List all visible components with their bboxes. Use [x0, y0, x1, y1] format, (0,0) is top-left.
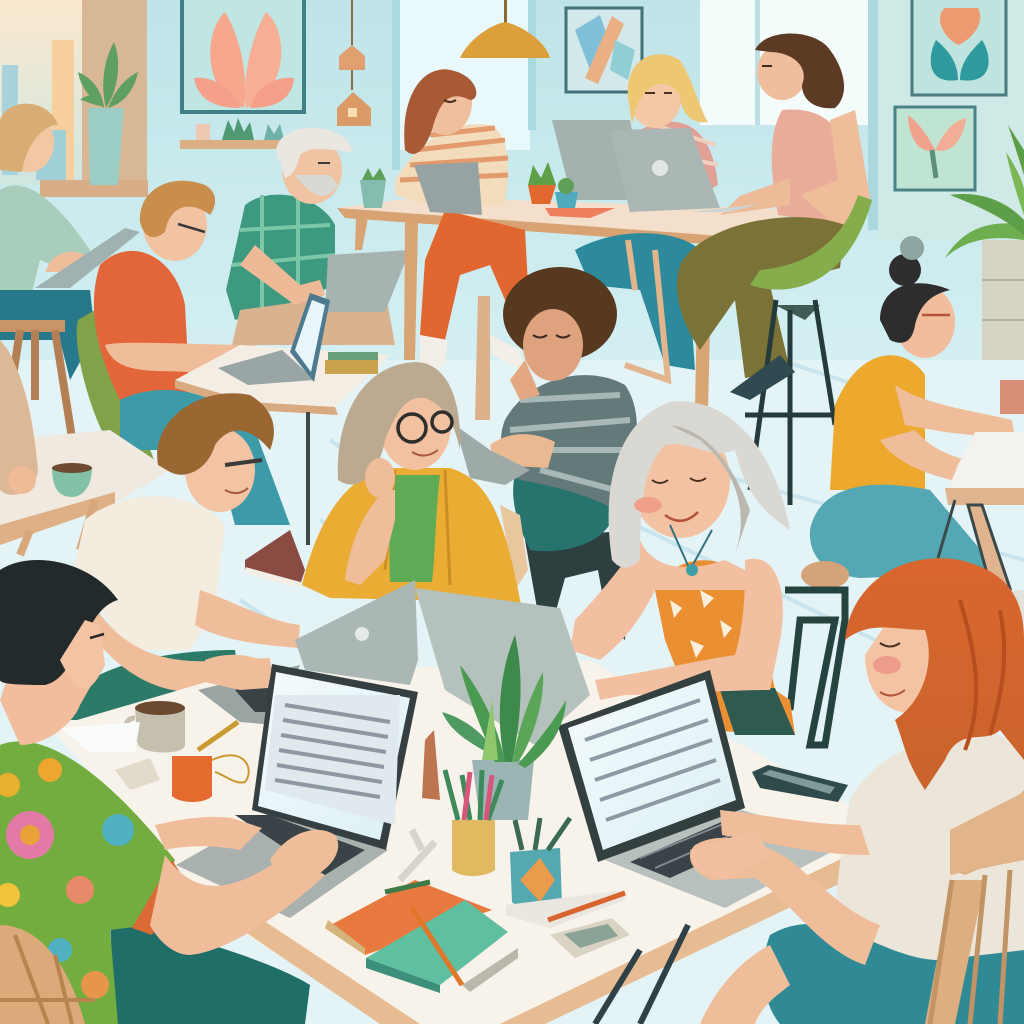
- pencil cups: [400, 730, 570, 909]
- desk: lower left table with cup: [0, 340, 170, 555]
- person: man in green plaid shirt: [226, 128, 410, 345]
- wall art: abstract: [566, 8, 642, 92]
- wall shelf with plants: [180, 118, 285, 149]
- wall art: butterfly: [895, 107, 975, 190]
- wall art: flower: [912, 0, 1006, 95]
- laptop: front right with document: [558, 670, 850, 908]
- laptop: back silver pair: [198, 580, 590, 745]
- icon: large plant right: [945, 125, 1024, 258]
- person: blonde woman in pink top: [552, 54, 718, 380]
- main table: [50, 660, 885, 1024]
- mugs and cup items left of laptop: [60, 701, 249, 802]
- person: man in white tee: [65, 393, 300, 720]
- left window with skyline: [0, 0, 148, 197]
- smartphone: [752, 765, 848, 802]
- person: man in red shirt: [77, 181, 305, 585]
- filing cabinet: [982, 240, 1024, 414]
- pendant lamp: [460, 0, 550, 58]
- person: woman in yellow jacket: [302, 362, 528, 610]
- back table items: [360, 162, 615, 218]
- person: brunette woman in tank top: [610, 34, 872, 505]
- person: man in floral shirt foreground: [0, 560, 338, 1024]
- person: woman in yellow top at right: [801, 236, 1024, 600]
- back table: [337, 197, 810, 410]
- wall art: pink leaves: [182, 0, 304, 112]
- icon: snake plant in pot: [442, 635, 566, 820]
- person: woman at far left: [0, 104, 140, 438]
- hanging house ornaments: [337, 0, 371, 126]
- icon: potted plant on sill: [78, 42, 138, 185]
- desk: mid left table with laptop: [175, 293, 390, 545]
- laptop: front left with document: [176, 664, 418, 918]
- person: red-haired woman foreground: [690, 558, 1024, 1024]
- notebooks and pens: [325, 880, 630, 993]
- person: silver-haired woman in orange top: [570, 401, 845, 745]
- desk: right table: [938, 432, 1024, 660]
- person: woman with afro and grey stripes: [455, 267, 637, 640]
- person: woman in striped sweater: [395, 69, 528, 420]
